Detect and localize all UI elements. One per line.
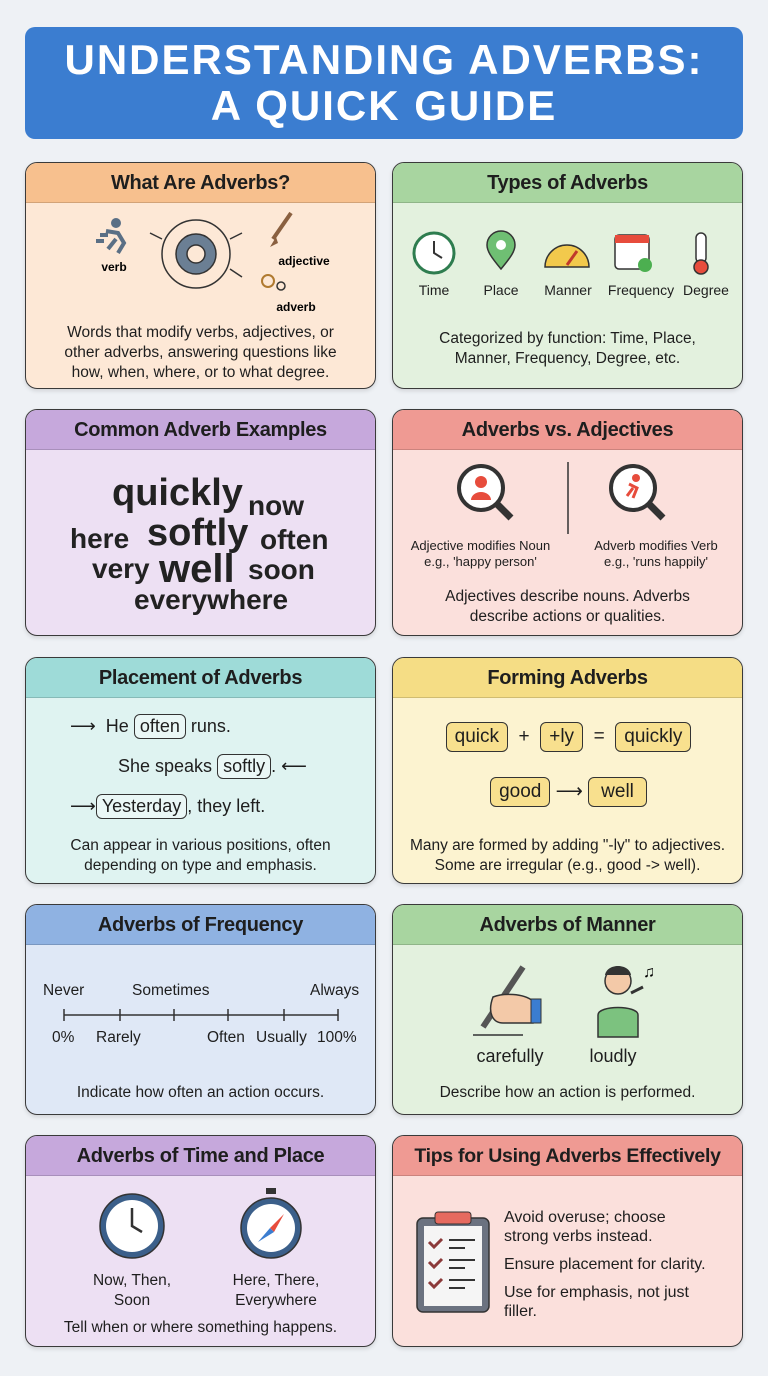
magnifier icons	[457, 462, 666, 534]
heading: Tips for Using Adverbs Effectively	[414, 1145, 721, 1167]
labels: Adjective modifies Noun	[411, 538, 550, 553]
description	[445, 588, 690, 625]
scale: Always	[310, 982, 359, 999]
panel: forming adverbs	[392, 657, 743, 884]
heading	[393, 1136, 742, 1176]
heading: Adverbs of Manner	[479, 914, 656, 936]
diagram: adjective	[278, 254, 330, 268]
labels	[93, 1272, 171, 1309]
word cloud: often	[260, 524, 328, 555]
description: Manner, Frequency, Degree, etc.	[455, 350, 680, 367]
panel: placement: ⟶ He runs.	[70, 716, 231, 736]
description: Adjectives describe nouns. Adverbs	[445, 588, 690, 605]
formula: + =	[519, 726, 605, 747]
formula	[446, 722, 691, 752]
word cloud: very	[92, 553, 150, 584]
description	[70, 837, 331, 874]
tips list: Ensure placement for clarity.	[504, 1256, 706, 1273]
icons	[99, 1188, 302, 1259]
heading	[393, 410, 742, 450]
word cloud: quickly	[112, 472, 243, 514]
panel: manner	[392, 904, 743, 1115]
panel: types of adverbs: Place	[483, 282, 519, 298]
description	[64, 324, 337, 381]
scale: Usually	[256, 1029, 307, 1046]
panel: forming adverbs: good	[499, 781, 541, 802]
description: Describe how an action is performed.	[440, 1084, 695, 1101]
heading: Common Adverb Examples	[74, 419, 327, 441]
panel: what are adverbs	[25, 162, 376, 389]
labels: e.g., 'happy person'	[424, 554, 537, 569]
word cloud: well	[159, 547, 235, 591]
scale: 0%	[52, 1029, 74, 1046]
heading	[26, 1136, 375, 1176]
description	[439, 330, 696, 367]
panel: placement: often	[140, 716, 180, 736]
scale	[43, 982, 359, 1046]
description: other adverbs, answering questions like	[64, 344, 337, 361]
heading: Types of Adverbs	[487, 172, 648, 194]
panel: types of adverbs: Frequency	[608, 282, 674, 298]
description: Some are irregular (e.g., good -> well).	[435, 857, 700, 874]
panel: time and place: Here, There,	[233, 1272, 319, 1289]
panel: forming adverbs: ⟶	[556, 781, 583, 802]
panel: time and place: Everywhere	[235, 1292, 317, 1309]
word cloud: here	[70, 523, 129, 554]
title	[25, 27, 743, 139]
labels: carefully	[476, 1046, 544, 1066]
heading: Forming Adverbs	[487, 667, 648, 689]
panel: time and place	[25, 1135, 376, 1347]
panel: placement: She speaks . ⟵	[118, 756, 307, 776]
word cloud: now	[248, 490, 304, 521]
scale: Often	[207, 1029, 245, 1046]
description: Words that modify verbs, adjectives, or	[67, 324, 334, 341]
word cloud: everywhere	[134, 584, 288, 615]
heading	[26, 410, 375, 450]
panel: adverbs vs adjectives	[392, 409, 743, 636]
description: describe actions or qualities.	[470, 608, 665, 625]
panel: types of adverbs	[392, 162, 743, 389]
labels: Now, Then,	[93, 1272, 171, 1289]
description: Indicate how often an action occurs.	[77, 1084, 324, 1101]
panel: placement: Yesterday	[102, 796, 181, 816]
labels	[410, 538, 550, 569]
icons row	[412, 230, 709, 275]
heading: Adverbs of Time and Place	[77, 1145, 324, 1167]
panel: placement: ⟶ , they left.	[70, 796, 265, 816]
panel: types of adverbs: Manner	[544, 282, 592, 298]
diagram: verb	[101, 260, 127, 274]
panel: frequency	[25, 904, 376, 1115]
description: Can appear in various positions, often	[70, 837, 331, 854]
heading	[26, 163, 375, 203]
examples	[70, 714, 307, 819]
word cloud: softly	[147, 512, 248, 554]
heading: Placement of Adverbs	[99, 667, 302, 689]
heading: Adverbs vs. Adjectives	[462, 419, 673, 441]
description: how, when, where, or to what degree.	[72, 364, 329, 381]
panel: adverbs vs adjectives: e.g., 'runs happily'	[604, 554, 708, 569]
icons	[473, 964, 655, 1038]
tips list	[504, 1209, 706, 1320]
panel: types of adverbs: Degree	[683, 282, 729, 298]
description: Tell when or where something happens.	[64, 1319, 337, 1336]
heading	[26, 905, 375, 945]
panel: adverbs vs adjectives: Adverb modifies Verb	[594, 538, 718, 553]
icon: clipboard	[416, 1212, 490, 1313]
panel: placement	[25, 657, 376, 884]
panel: forming adverbs: well	[601, 781, 634, 802]
heading: Adverbs of Frequency	[98, 914, 303, 936]
title: A QUICK GUIDE	[211, 82, 557, 129]
heading	[393, 658, 742, 698]
labels: Time	[419, 282, 449, 298]
panel: tips	[392, 1135, 743, 1347]
title: UNDERSTANDING ADVERBS:	[64, 36, 704, 83]
description	[410, 837, 725, 874]
tips list: Avoid overuse; choose strong verbs instead.	[504, 1209, 666, 1245]
heading	[393, 163, 742, 203]
labels: Soon	[114, 1292, 150, 1309]
diagram	[96, 212, 330, 314]
scale: Sometimes	[132, 982, 210, 999]
panel: common examples	[25, 409, 376, 636]
heading	[26, 658, 375, 698]
panel: placement: softly	[223, 756, 265, 776]
tips list: Use for emphasis, not just filler.	[504, 1284, 689, 1320]
scale: 100%	[317, 1029, 357, 1046]
panel: manner: loudly	[589, 1046, 637, 1066]
formula: +ly	[549, 726, 574, 747]
icons: ♫	[643, 964, 655, 981]
description: Categorized by function: Time, Place,	[439, 330, 696, 347]
description: depending on type and emphasis.	[84, 857, 317, 874]
scale: Never	[43, 982, 84, 999]
heading: What Are Adverbs?	[111, 172, 290, 194]
word cloud: soon	[248, 554, 315, 585]
formula: quickly	[624, 726, 682, 747]
heading	[393, 905, 742, 945]
word cloud	[70, 472, 328, 615]
scale: Rarely	[96, 1029, 141, 1046]
diagram: adverb	[276, 300, 316, 314]
description: Many are formed by adding "-ly" to adjectives.	[410, 837, 725, 854]
formula: quick	[455, 726, 499, 747]
